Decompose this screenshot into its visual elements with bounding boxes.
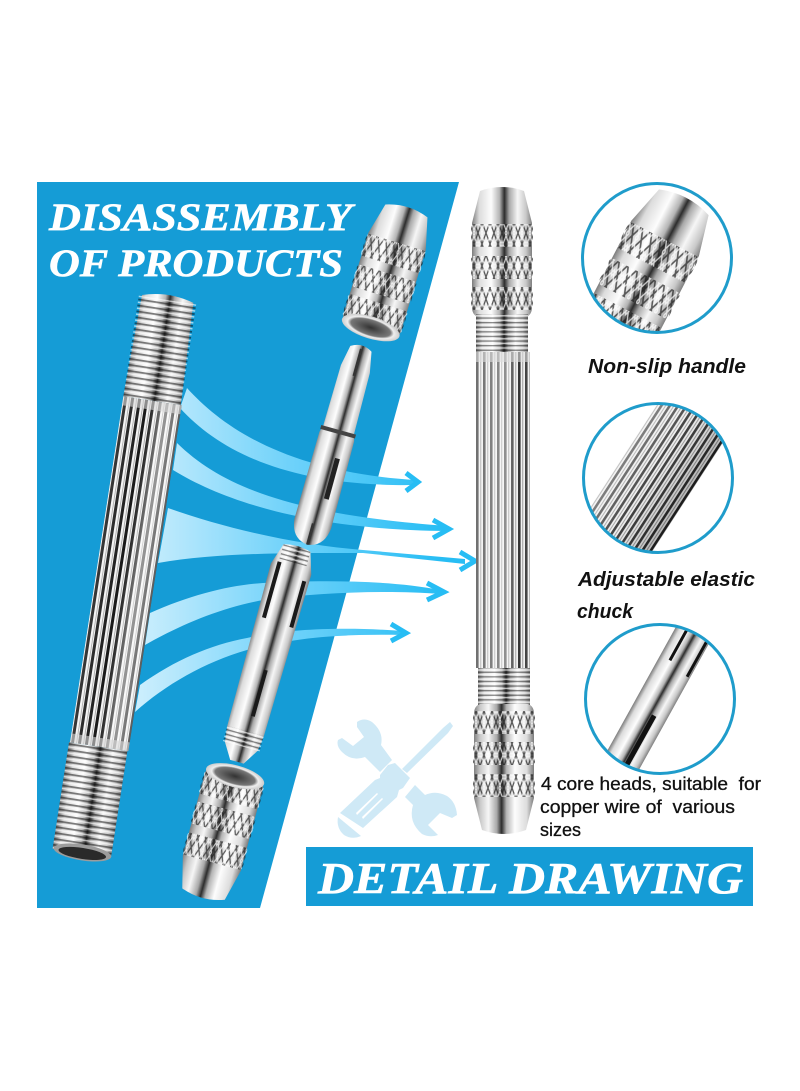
sub: bottom cap: [473, 704, 535, 834]
banner: detail drawing: DETAIL DRAWING: [317, 854, 743, 903]
tool part: upper chuck: [289, 340, 380, 550]
label: core heads description: [540, 774, 761, 840]
circle: non-slip handle detail: [581, 182, 733, 334]
label: core heads description: copper wire of various: [540, 797, 735, 817]
arrow: flow one: [180, 388, 418, 491]
label: adjustable elastic chuck: chuck: [577, 601, 634, 623]
arrow: flow four: [145, 581, 444, 645]
arrow: flow three: [158, 508, 475, 570]
tool part: ribbed rod: [52, 290, 198, 865]
label: non-slip handle: Non-slip handle: [588, 356, 746, 378]
tool: assembled pin vise: [471, 187, 535, 834]
heading: disassembly of products: OF PRODUCTS: [49, 242, 343, 285]
label: adjustable elastic chuck: Adjustable elastic: [577, 569, 755, 591]
tool part: upper knurled cap: [338, 198, 437, 347]
tool part: lower chuck: [217, 540, 318, 767]
banner: detail drawing: [306, 847, 753, 906]
sub: top cap: [471, 187, 533, 317]
sub: top thread: [476, 314, 528, 352]
icon: wrench and screwdriver: [338, 720, 457, 838]
label: core heads description: 4 core heads, suitable for: [541, 774, 761, 794]
tool part: lower knurled cap: [173, 758, 268, 906]
label: adjustable elastic chuck: [577, 569, 755, 623]
circle: ribbed handle detail: [582, 402, 734, 554]
label: core heads description: sizes: [540, 820, 581, 840]
circle: chuck slots detail: [584, 623, 736, 775]
panel: disassembly background: [37, 182, 459, 908]
sub: ribbed handle: [476, 352, 530, 668]
heading: disassembly of products: [48, 196, 356, 285]
arrow: flow two: [173, 443, 449, 538]
heading: disassembly of products: DISASSEMBLY: [48, 196, 356, 239]
arrow: flow five: [135, 624, 406, 712]
sub: bottom thread: [478, 668, 530, 708]
